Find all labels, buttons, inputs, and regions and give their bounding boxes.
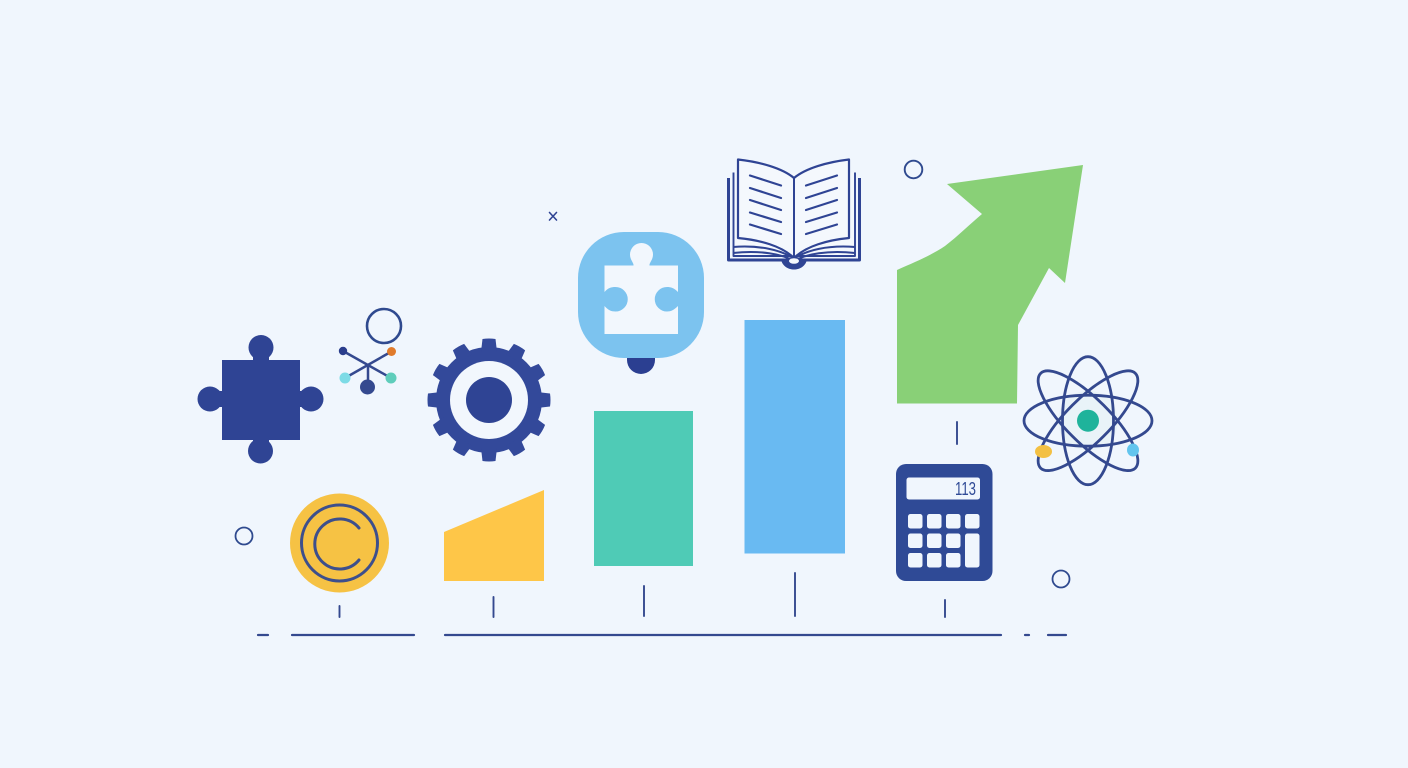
icon: navy puzzle piece	[198, 335, 324, 464]
icon: open book	[728, 160, 860, 270]
icon: atom	[1024, 357, 1152, 485]
icon: puzzle badge	[578, 232, 704, 374]
icon: calculator	[896, 464, 992, 581]
baseline axis	[258, 634, 1066, 636]
icon: copyright coin	[290, 494, 389, 592]
axis tick marks	[340, 422, 957, 617]
small circle: top right	[905, 161, 922, 178]
calculator display reading: 113	[955, 479, 976, 499]
icon: small cross mark	[550, 212, 556, 220]
arrow: green growth arrow	[897, 165, 1083, 404]
bar: teal	[594, 411, 693, 566]
bar: yellow wedge	[444, 490, 544, 581]
bar: blue	[744, 320, 845, 554]
small circle: bottom right	[1052, 570, 1070, 588]
small circle: left	[236, 528, 252, 544]
icon: network nodes	[339, 309, 401, 394]
icon: gear	[428, 338, 550, 462]
